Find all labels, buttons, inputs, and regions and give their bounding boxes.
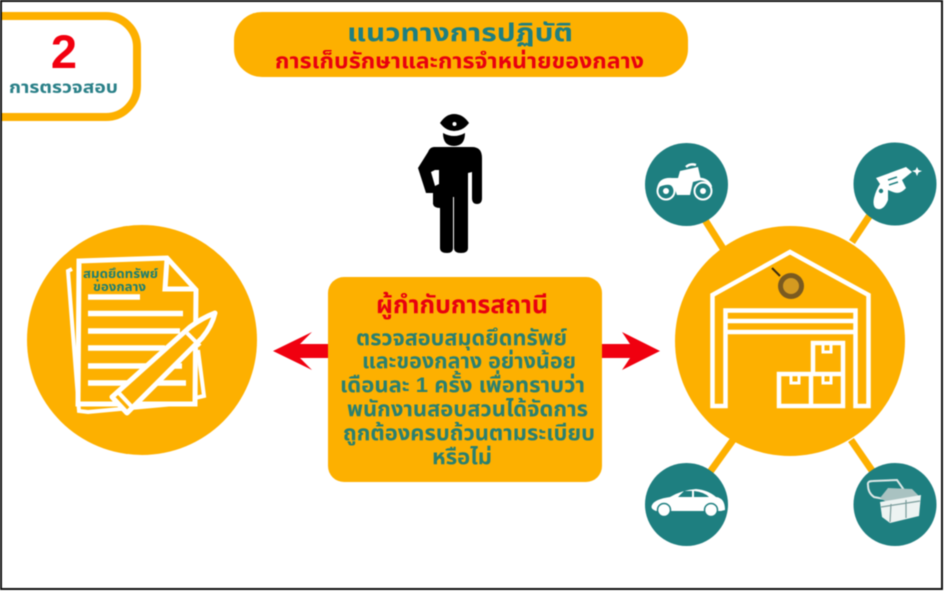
panel: inspection text: หรือไม่ [432,446,492,469]
arrow: left [273,332,328,370]
icon: car [645,463,728,546]
icon: motorcycle [645,143,728,226]
icon: document and pen: ของกลาง [93,280,146,294]
panel: inspection text: เดือนละ 1 ครั้ง เพื่อทราบว่า [340,370,585,397]
icon: treasure chest [854,463,936,546]
panel: warehouse circle [675,226,905,456]
icon: warehouse [712,252,868,406]
icon: revolver [854,142,936,226]
panel: inspection text: ตรวจสอบสมุดยึดทรัพย์ [356,327,567,351]
icon: document and pen [68,258,215,413]
badge: step 2: 2 [51,25,77,78]
panel: inspection text [328,277,602,482]
panel: inspection text: และของกลาง อย่างน้อย [362,350,576,373]
badge: step 2 [2,16,137,117]
icon: document and pen: สมุดยึดทรัพย์ [83,267,158,281]
title pill: การเก็บรักษาและการจำหน่ายของกลาง [275,50,644,73]
panel: inspection text: ถูกต้องครบถ้วนตามระเบียบ [343,422,595,446]
panel: record book circle [27,225,257,455]
title pill [234,12,688,77]
panel: inspection text: พนักงานสอบสวนได้จัดการ [347,398,588,421]
panel: inspection text: ผู้กำกับการสถานี [376,291,548,320]
title pill: แนวทางการปฏิบัติ [347,19,573,47]
icon: police officer [418,114,482,253]
arrow: right [602,332,660,370]
icon: agency seal [772,268,804,299]
connector lines [705,215,873,472]
badge: step 2: การตรวจสอบ [9,78,118,97]
